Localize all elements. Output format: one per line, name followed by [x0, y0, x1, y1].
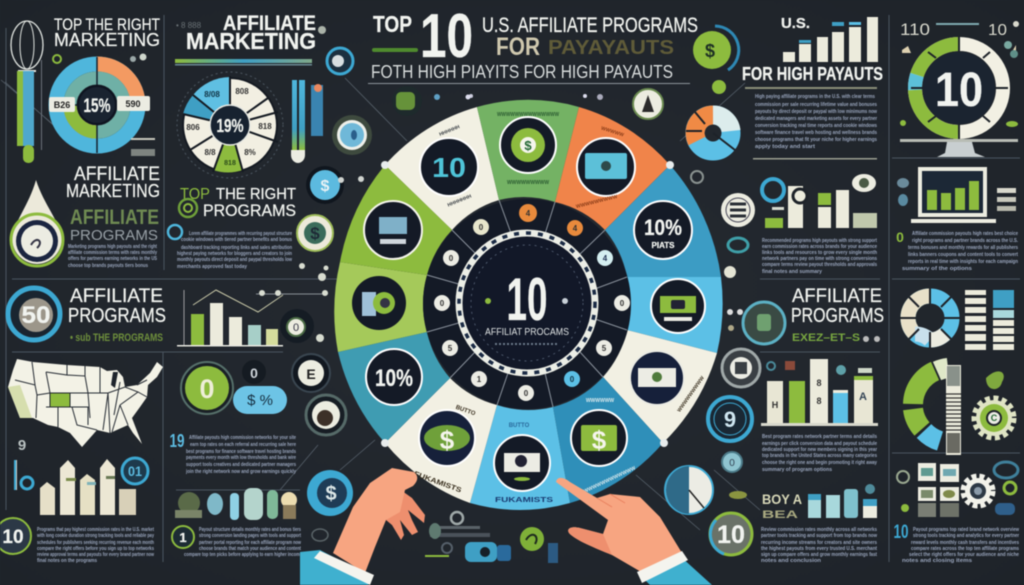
text block: Payout structure details monthly rates and bonus tiers [199, 527, 301, 533]
text block: choose the right one and begin promoting it right away [762, 460, 877, 466]
text block: Review commission rates monthly across all networks [761, 527, 877, 533]
chart: arrow bars [15, 459, 136, 515]
text block: choose top brands payouts tiers bonus [68, 263, 148, 269]
heading: affiliate marketing large [176, 12, 316, 54]
heading: affiliate programs muted [70, 206, 159, 244]
heading: affiliate programs: EXEZ–ET–S [792, 332, 860, 344]
text block with green zero: 0 [896, 229, 904, 245]
text block [762, 238, 877, 275]
chart: segmented donut [900, 288, 960, 348]
segment 4 blue [605, 165, 721, 277]
medallion 10: ten percent [366, 349, 422, 405]
center badge: 10 [506, 266, 548, 333]
icon: 10 badge: 10 [2, 527, 24, 548]
text block: Best program rates network partner terms and details [762, 434, 877, 440]
text block: notes and closing items [902, 558, 972, 564]
icon: light blue keyhole: 0 [729, 458, 735, 469]
inner small icons: 0 [524, 389, 529, 398]
text block: payments every month with low thresholds and bank wire [186, 455, 296, 461]
heading: affiliate programs [791, 286, 884, 344]
medallion 5: cash green [651, 279, 705, 333]
center badge: AFFILIAT PROCAMS [485, 327, 569, 338]
icon: small zero [242, 360, 266, 384]
chart: bars [177, 290, 283, 346]
text block: recurring income streams for creators and site owners [761, 540, 877, 546]
inner small icons [434, 204, 630, 401]
heading: affiliate marketing large: MARKETING [186, 28, 316, 54]
heading: affiliate marketing large: AFFILIATE [223, 12, 316, 35]
chart: pie wheel 19%: 806 [186, 123, 200, 132]
icon: pillar ring [722, 349, 760, 387]
chart: donut 15%: 590 [125, 99, 141, 109]
icon: whisk [11, 21, 43, 163]
illustration: right pointing hand [556, 478, 712, 585]
segment 2 green [477, 100, 579, 202]
text block: compare the right offers before you sign up to top networks [37, 546, 154, 552]
chart: donut 15% [49, 57, 150, 153]
chart: mixed blocks with label [762, 484, 877, 521]
medallion 7: dollar bill: $ [592, 425, 607, 455]
inner small icons: 5 [448, 344, 453, 353]
inner small icons: 4 [603, 254, 608, 263]
icon: green shield [392, 86, 422, 116]
panel: right column two [894, 20, 1020, 564]
icon: 10 badge [710, 513, 752, 555]
illustration: left hand [300, 468, 425, 585]
heading: affiliate programs: AFFILIATE [70, 286, 163, 307]
icon: photo circle [306, 395, 346, 435]
heading: affiliate programs: • sub THE PROGRAMS [70, 332, 163, 344]
text block: Recommended programs high payouts with strong support [762, 238, 877, 244]
heading: affiliate marketing large: • 8 888 [176, 21, 202, 30]
icon: light blue keyhole [722, 452, 742, 472]
text block: best programs for finance software travel hosting brands [186, 449, 296, 455]
icon grid cards [897, 463, 959, 517]
text block: join the right network now and grow earnings quickly [185, 469, 296, 475]
heading: affiliate marketing: AFFILIATE [74, 164, 160, 185]
text block: compare top ten picks before applying to earn higher income [184, 552, 302, 558]
icon: green percent coin: 0 [199, 374, 215, 404]
icon: blue nine [708, 397, 752, 441]
chart: pie wheel 19% [177, 72, 283, 178]
callout: dollar percent pill: $ % [247, 392, 273, 409]
medallion 4: ten percent: PIATS [652, 241, 675, 250]
panel: affiliate programs left lower: 9 [18, 437, 26, 454]
text block: Programs that pay highest commission rates in the U.S. market [37, 527, 154, 533]
medallion 3: cash: WWWWW [600, 126, 625, 139]
icon: blue dollar badge: $ [325, 483, 337, 505]
icon: 10 badge: 10 [717, 521, 745, 549]
text block [68, 244, 157, 269]
text block: Lorem affiliate programmes with recurring payout structure [189, 231, 292, 237]
text block: commission per sale recurring lifetime value and bonuses [755, 102, 877, 108]
chart: lettered bars: H [772, 400, 778, 410]
text block [184, 527, 302, 558]
icon: drop [11, 180, 63, 266]
heading: affiliate programs: PROGRAMS [791, 305, 884, 327]
text block with green zero [896, 229, 1018, 272]
text block [755, 94, 878, 150]
panel: second column marketing [168, 12, 353, 281]
medallion 12: chart screen [364, 201, 422, 259]
text block: notes and conclusion [761, 558, 821, 564]
center badge [459, 233, 595, 373]
medallion 4: ten percent: 10% [644, 215, 682, 240]
icon: dollar coin [297, 215, 333, 251]
title: PAYAYAUTS [548, 37, 674, 59]
medallion 8: cash icon: FUKAMISTS [495, 497, 553, 504]
chart: pie wheel 19%: 818 [224, 160, 236, 167]
chart: donut 15%: B26 [54, 100, 70, 110]
heading: top the right programs: PROGRAMS [203, 201, 296, 220]
medallion 9: green dollar [413, 405, 476, 495]
text block: partner portal reporting for each affiliate program now [199, 540, 302, 546]
text block [761, 527, 878, 564]
medallion 9: green dollar: $ [440, 425, 455, 455]
segment 12 green [340, 165, 452, 275]
text block: links tools and resources to grow every single month [762, 250, 877, 256]
heading: top the right marketing: TOP THE RIGHT [54, 15, 160, 34]
heading: affiliate programs: PROGRAMS [68, 305, 166, 327]
title: FOR [496, 33, 540, 61]
text block: merchants approved fast today [177, 264, 247, 270]
segment 3 orange [555, 107, 670, 230]
medallion 7: dollar bill [571, 398, 637, 497]
medallion 2: green dollar: WWWWWWWWWWWWWW [497, 112, 559, 118]
medallion 7: dollar bill: WWWWWW [586, 398, 614, 404]
segment 7 blue [553, 377, 663, 503]
text block: final notes on the programs [37, 558, 97, 564]
heading: top the right marketing: MARKETING [54, 30, 160, 50]
chart: mixed blocks with label: BEA [762, 509, 798, 521]
inner small icons: 0 [620, 299, 625, 308]
heading: top the right programs: THE RIGHT [216, 186, 296, 203]
icon: spiral coin [693, 26, 739, 70]
medallion 11: document [352, 276, 406, 330]
panel: right column one [665, 15, 884, 564]
inner small icons: 0 [449, 254, 454, 263]
medallion 4: ten percent [634, 201, 692, 259]
icon: blue ring badge [327, 48, 353, 74]
icon: green coin [280, 309, 314, 343]
heading: affiliate programs muted: PROGRAMS [70, 227, 158, 244]
medallion 2: green dollar: $ [524, 138, 532, 153]
medallion 3: cash [575, 126, 635, 210]
text block: with long cookie duration strong tracking tools and reliable pay [36, 533, 154, 539]
chart: striped columns [965, 290, 1014, 350]
chart: lettered bars: 8 [816, 378, 822, 388]
text block: the highest payouts from every trusted U.S. merchant [761, 546, 877, 552]
text block: monthly payouts direct deposit and paypal thresholds low [177, 257, 293, 263]
medallion 9: green dollar: FUKAMISTS [413, 471, 463, 495]
text block: conversion tracking real time reports and cookie windows [755, 123, 877, 129]
numeral: blue 10: 10 [894, 522, 908, 543]
icon: white gear [963, 476, 993, 506]
chart: pie wheel 19%: 8% [244, 148, 256, 157]
inner small icons: 5 [602, 344, 607, 353]
panel: top left marketing [11, 15, 160, 269]
text block: apply today and start [755, 144, 815, 150]
icon: green gear [974, 398, 1014, 438]
heading: affiliate programs muted: AFFILIATE [70, 206, 159, 229]
icon: 01 blue circle [122, 458, 148, 484]
text block: payouts by direct deposit or paypal with low minimums now [755, 109, 878, 115]
text block: offers for partners earning networks in the US [68, 256, 157, 262]
icon: pie small [665, 466, 713, 514]
inner small icons: 4 [573, 224, 578, 233]
chart: pie wheel 19%: 8/8 [204, 148, 216, 157]
medallion 1: ten: HHHHHH [438, 124, 461, 138]
icon: teal ring badge [743, 302, 785, 344]
heading: for high payouts: FOR HIGH PAYAUTS [742, 64, 883, 84]
text block: highest paying networks for bloggers and creators to join [177, 251, 292, 257]
medallion 2: green dollar: WWWWWWWWW [507, 180, 549, 186]
medallion 8: cash icon: BUTTO [509, 423, 530, 429]
text block: summary of program options [762, 467, 832, 473]
chart: donut 15%: 15% [84, 96, 111, 117]
icon: spiral coin: $ [705, 41, 715, 61]
chart: orange blue pie [686, 112, 735, 151]
icon: blue nine: 9 [724, 407, 736, 432]
icon: laptop chart [897, 167, 1016, 223]
segment 5 light blue [627, 277, 723, 353]
numerals top: 10 [988, 22, 1007, 39]
inner small icons: 1 [477, 375, 482, 384]
inner small icons: 0 [570, 375, 575, 384]
chart: mixed bars with icons [762, 174, 877, 228]
text block [36, 527, 155, 564]
chart: monitor donut 10: 10 [935, 64, 983, 117]
text block [762, 434, 877, 473]
chart: pie wheel 19%: 808 [235, 87, 249, 96]
icon: blue dollar circle [306, 166, 344, 204]
medallion 1: ten: HHHHHHH [447, 193, 473, 209]
icon: 01 blue circle: 01 [128, 463, 142, 479]
chart: pie wheel 19%: 818 [258, 122, 272, 131]
chart: mixed blocks with label: BOY A [762, 491, 802, 507]
numerals top [900, 20, 1019, 39]
icon: green percent coin [181, 362, 233, 414]
heading: top the right marketing [54, 15, 160, 50]
icon: 50 badge: 50 [22, 302, 50, 329]
text block: final notes and summary [762, 269, 822, 275]
text block: partner tools tracking and support from top brands now [761, 533, 878, 539]
connector dots [381, 161, 674, 447]
text block: earn top rates on each referral and recurring sale here [190, 442, 296, 448]
segment 6 white [603, 330, 717, 443]
icon: 1 green ring [172, 526, 194, 548]
icon: 50 badge [8, 288, 60, 340]
chart: lettered bars: 8 [816, 396, 822, 406]
panel: lower second column [170, 354, 353, 558]
segment 1 white [385, 107, 499, 230]
text block: schedules for publishers seeking recurring revenue each month [37, 540, 154, 546]
map: United States [8, 359, 163, 447]
icon: 19 blue numeral: 19 [170, 431, 184, 451]
chart: pie wheel 19%: 8/08 [204, 90, 220, 99]
heading: affiliate marketing [66, 164, 160, 201]
chart: tall strip [946, 365, 961, 455]
medallion 6: bill [630, 351, 706, 414]
text block: top brands in the United States across many categories [762, 453, 877, 459]
segment 9 white [385, 378, 497, 503]
medallion 6: bill: WWWWWWWWW [677, 375, 706, 414]
icon: green coin: 0 [293, 322, 299, 334]
heading: affiliate programs [68, 286, 166, 344]
title [368, 2, 698, 84]
callout: dollar percent pill [233, 386, 287, 414]
segment 11 light green [334, 262, 427, 352]
text block: software finance travel web hosting and wellness brands [755, 130, 877, 136]
panel: affiliate programs left lower [0, 286, 328, 564]
inner dark ring [423, 199, 631, 409]
icon: green gear: C [991, 413, 998, 423]
text block: dashboard tracking reporting links and sales attribution [181, 245, 292, 251]
icon: document circle [292, 354, 330, 392]
heading: U.S.: U.S. [781, 15, 810, 32]
text block: High paying affiliate programs in the U.S. with clear terms [755, 94, 875, 100]
title: U.S. AFFILIATE PROGRAMS [482, 14, 698, 37]
icon: tube [291, 80, 323, 163]
text block with green zero: summary of the options [902, 266, 972, 272]
text block [185, 435, 296, 475]
medallion 2: green dollar [497, 112, 559, 186]
title: TOP [373, 11, 412, 37]
text block: compare terms review payout thresholds and approvals [762, 262, 877, 268]
text block: network partners pay on time with strong conversions [762, 256, 877, 262]
text block: sign up compare offers and grow monthly earnings fast [761, 552, 877, 558]
chart: pie wheel 19%: 19% [216, 116, 244, 136]
icon: document circle: E [306, 366, 316, 382]
text block: affiliate commission terms with rates monthly [68, 250, 157, 256]
medallion 8: cash icon [494, 423, 553, 504]
icon: dollar coin: $ [310, 224, 320, 243]
icon: 1 green ring: 1 [179, 530, 187, 545]
text block: earn commission rates across brands for your audience [762, 244, 877, 250]
text block: strong conversion landing pages with tools and support [199, 533, 301, 539]
heading: affiliate programs: AFFILIATE [792, 286, 882, 307]
inner small icons: 0 [440, 299, 445, 308]
text block: Marketing programs high payouts and the right [68, 244, 157, 250]
text block: choose programs that fit your niche for higher earnings [755, 137, 877, 143]
segment 10 teal [338, 332, 450, 443]
text block: dedicated support for new members signing in this year [762, 447, 877, 453]
text block [902, 527, 1020, 564]
chart: gauge arc [913, 368, 948, 441]
icon: 10 badge [0, 518, 31, 554]
inner small icons: 0 [479, 223, 484, 232]
medallion 3: cash: WWWWWWWWW [575, 194, 618, 210]
chart: monitor donut 10 [900, 36, 1018, 157]
inner small icons: 4 [526, 209, 531, 218]
medallion 1: ten: 10 [432, 152, 466, 183]
chart: rising bars [783, 17, 878, 62]
text block: choose brands that match your audience and content [199, 546, 301, 552]
icon: blue dollar badge [307, 470, 353, 516]
icon: pin circle [633, 89, 663, 119]
text block [168, 225, 293, 270]
text block: cookie windows with tiered partner benefits and bonus [181, 237, 292, 243]
heading: top the right programs [179, 186, 296, 220]
text block: Affiliate payouts high commission networks for your site [189, 435, 296, 441]
title: FOTH HIGH PIAYITS FOR HIGH PAYAUTS [371, 62, 673, 82]
icon: ring left [332, 115, 372, 155]
medallion 10: ten percent: 10% [375, 365, 413, 392]
medallion 1: ten [420, 124, 478, 209]
icon row [175, 488, 297, 520]
chart: lettered bars: A [859, 391, 867, 403]
wheel chart [334, 100, 723, 510]
chart: lettered bars [761, 359, 878, 426]
heading: top the right programs: TOP [180, 186, 210, 203]
heading: affiliate marketing: MARKETING [66, 181, 160, 201]
medallion 7: dollar bill: WWWWWWWWWWWWW [579, 465, 637, 497]
title: 10 [420, 2, 473, 71]
icon: blue dollar circle: $ [321, 178, 330, 195]
text block: earnings per click conversion data and payout schedule [762, 441, 877, 447]
icons around the wheel top [332, 26, 755, 227]
text block: support tools creatives and dedicated partner managers [186, 462, 296, 468]
icon: small zero: 0 [250, 365, 258, 381]
segment 8 light blue [470, 405, 570, 510]
text block: dedicated managers and marketing assets for every partner [755, 116, 877, 122]
icons under wheel [425, 512, 558, 563]
numerals top: 110 [900, 20, 930, 39]
medallion 9: green dollar: BUTTO [455, 405, 476, 418]
text block: review approval terms and payouts for every brand partner now [37, 552, 155, 558]
icon: list coin [721, 193, 755, 227]
